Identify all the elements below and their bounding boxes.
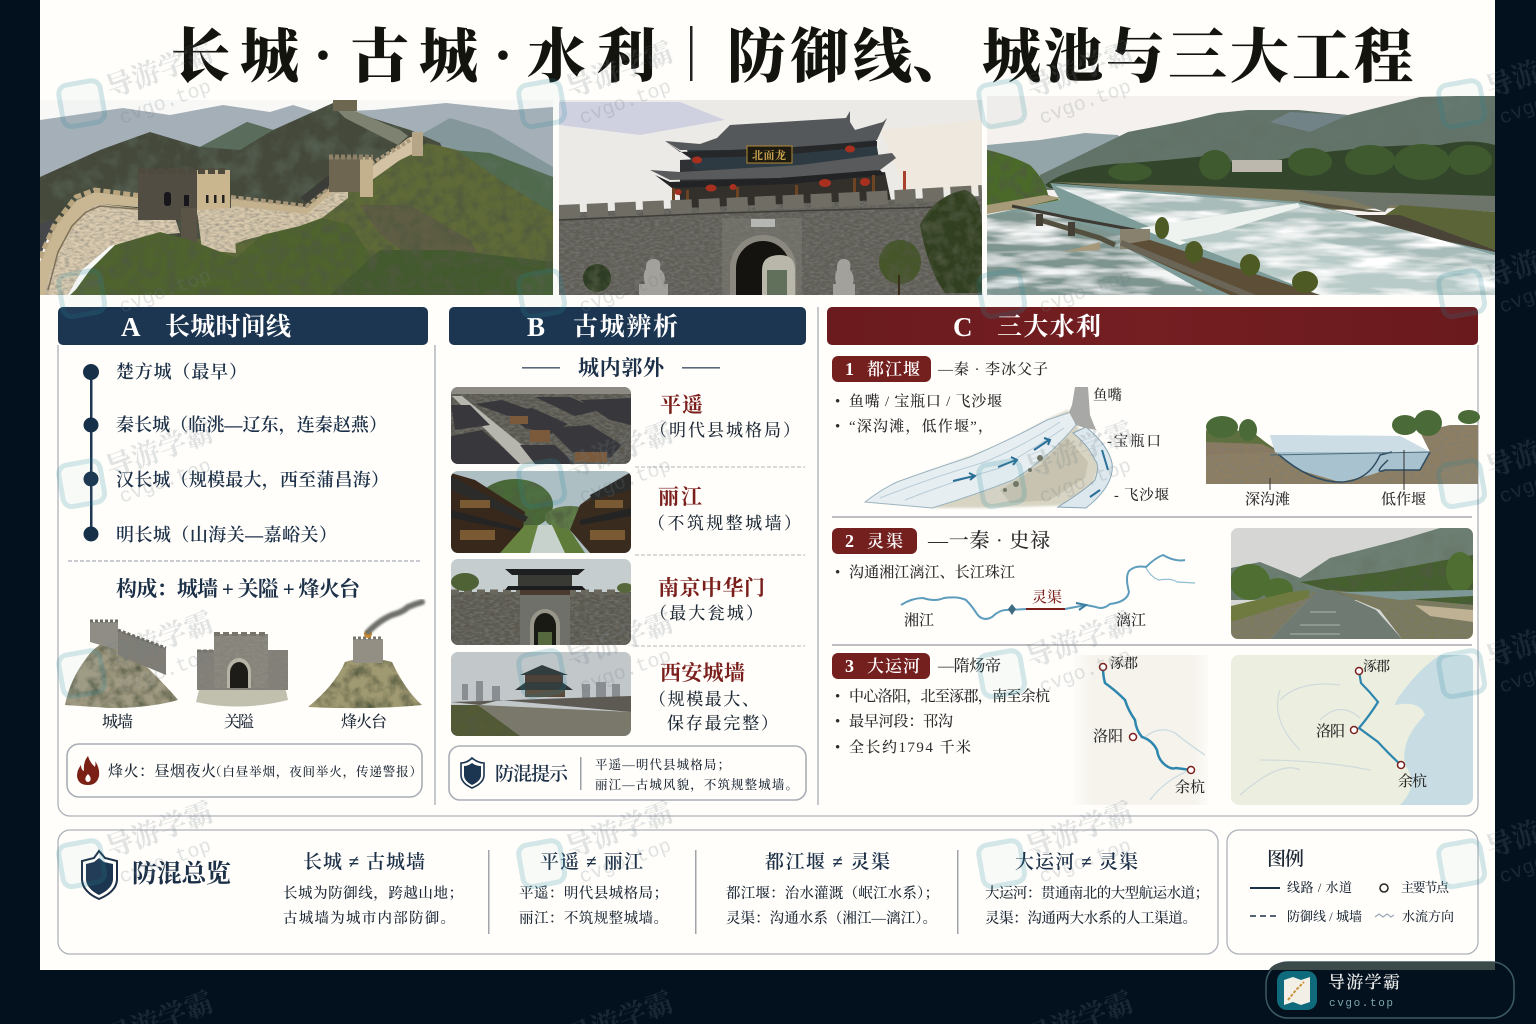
labels of cities: 保存最完整）	[667, 714, 778, 733]
left big wall	[40, 202, 180, 295]
labels of diagram: - 飞沙堰	[1114, 487, 1170, 504]
far treeline	[1045, 142, 1495, 196]
watermarks: cvgo.top	[117, 455, 215, 510]
watermarks: 导游学霸	[101, 796, 218, 865]
main panels frame	[58, 345, 1478, 816]
icon: fortified pass	[196, 634, 288, 707]
watermarks: 导游学霸	[101, 416, 218, 485]
water	[987, 183, 1495, 295]
watermarks: cvgo.top	[117, 645, 215, 700]
watermarks: 导游学霸	[561, 416, 678, 485]
labels of components: 城墙	[102, 712, 133, 731]
watermarks: cvgo.top	[117, 265, 215, 320]
labels of cities: （不筑规整城墙）	[648, 514, 801, 533]
far wall	[338, 111, 408, 145]
diagram: Dujiangyan river split	[865, 387, 1112, 508]
panel A: Great Wall timeline	[58, 307, 428, 797]
photo: Great Wall on mountain ridge	[40, 97, 553, 295]
title: 城池与三大工程	[982, 24, 1413, 90]
watermarks: 导游学霸	[1021, 416, 1138, 485]
labels of cities: 平遥	[660, 393, 703, 417]
photo: ancient city gate tower	[559, 100, 982, 295]
title: 防御线	[727, 24, 912, 90]
section 1: Dujiangyan: •	[835, 394, 840, 410]
wall section mid	[231, 192, 348, 244]
title: ·	[313, 22, 333, 88]
section 3: Grand Canal	[832, 653, 1473, 805]
section 1: Dujiangyan: 鱼嘴 / 宝瓶口 / 飞沙堰	[849, 392, 1002, 410]
tag 2: 灵渠	[867, 531, 903, 551]
section 3: Grand Canal: •	[835, 740, 840, 756]
diagram: Lingqu canal	[901, 555, 1195, 619]
watermarks: cvgo.top	[117, 76, 215, 131]
comparison 4	[985, 850, 1209, 927]
trees	[583, 264, 611, 292]
tag 2: 2	[845, 531, 854, 551]
watermarks: 导游学霸	[1021, 606, 1138, 675]
map: canal route sketch: 涿郡	[1110, 656, 1138, 672]
comparison 1: 长城 ≠ 古城墙	[303, 851, 425, 873]
watermarks: cvgo.top	[1037, 455, 1135, 510]
labels of cross-section: 低作堰	[1381, 491, 1426, 508]
timeline: 秦长城（临洮—辽东，连秦赵燕）	[116, 414, 387, 436]
photo: Dujiangyan river weir	[987, 95, 1495, 295]
map: China east canal: 涿郡	[1363, 659, 1390, 675]
gate	[722, 218, 802, 295]
tag 1: 1	[845, 359, 854, 379]
labels of cities: （最大瓮城）	[650, 604, 763, 623]
watermarks: 导游学霸	[1021, 796, 1138, 865]
callout: anti-confusion hint: 丽江—古城风貌，不筑规整城墙。	[595, 777, 798, 792]
panel: legend: 水流方向	[1402, 909, 1454, 924]
section 2: Lingqu	[832, 528, 1474, 639]
comparison 4: 大运河 ≠ 灵渠	[1015, 850, 1138, 873]
map: canal route sketch: 余杭	[1175, 778, 1205, 796]
labels of cross-section	[1245, 491, 1426, 508]
header C: C	[953, 312, 972, 342]
first tower	[138, 170, 200, 220]
panel: anti-confusion overview	[58, 830, 1218, 954]
labels of canal: 湘江	[904, 612, 934, 629]
watermarks: 导游学霸	[101, 606, 218, 675]
panel: legend: 主要节点	[1401, 880, 1450, 895]
watermarks: cvgo.top	[1037, 645, 1135, 700]
watermarks: cvgo.top	[1037, 265, 1135, 320]
watermarks: cvgo.top	[1037, 835, 1135, 890]
lanterns	[674, 146, 870, 195]
second tower	[329, 157, 360, 192]
tag 3	[832, 653, 930, 679]
map: China east canal	[1231, 655, 1473, 805]
icon: map logo	[1277, 971, 1317, 1010]
icon: wall on hill	[65, 621, 178, 708]
timeline: 明长城（山海关—嘉峪关）	[116, 525, 337, 545]
photo: Lijiang	[451, 471, 631, 553]
watermarks: 导游学霸	[101, 36, 218, 105]
section 1: Dujiangyan: •	[835, 419, 840, 435]
title: 水利	[527, 24, 656, 90]
watermarks: 导游学霸	[561, 606, 678, 675]
comparison 1: 古城墙为城市内部防御。	[283, 909, 455, 927]
comparison 4: 灵渠：沟通两大水系的人工渠道。	[985, 909, 1197, 927]
section 2: Lingqu: 沟通湘江漓江、长江珠江	[849, 564, 1015, 581]
tag 3: 3	[845, 656, 854, 676]
title	[171, 22, 1413, 90]
labels of canal: 灵渠	[1032, 588, 1062, 606]
shrubs	[72, 218, 371, 295]
photo: Lingqu canal	[1230, 528, 1474, 639]
section 3: Grand Canal: •	[835, 689, 840, 705]
comparison 3: 灵渠：沟通水系（湘江—漓江）。	[726, 909, 937, 927]
right wall to second tower	[373, 136, 412, 180]
watermarks: cvgo.top	[577, 835, 675, 890]
labels of cities: 南京中华门	[658, 576, 765, 600]
panel C: three water projects	[827, 307, 1480, 805]
overview heading: 防混总览	[132, 860, 231, 888]
watermarks: 导游学霸	[561, 36, 678, 105]
photo: ancient city gate tower: 北面龙	[752, 148, 786, 162]
map: canal route sketch: 洛阳	[1093, 728, 1123, 745]
tag 3: 大运河	[867, 657, 920, 676]
icon: large shield	[82, 851, 117, 899]
section 3: Grand Canal: 最早河段：邗沟	[849, 713, 953, 730]
callout: beacon note	[67, 744, 422, 797]
labels of diagram: -宝瓶口	[1107, 433, 1161, 450]
comparison 3	[726, 850, 939, 927]
section 1: Dujiangyan: —秦 · 李冰父子	[937, 360, 1048, 378]
header C: 三大水利	[997, 313, 1101, 341]
icon: flame	[77, 756, 99, 785]
title: ·	[493, 22, 513, 88]
labels of cities: 西安城墙	[660, 661, 745, 685]
panel B: ancient cities	[449, 307, 806, 800]
labels of cities: （明代县城格局）	[650, 421, 800, 440]
timeline: 汉长城（规模最大，西至蒲昌海）	[116, 469, 389, 491]
banks	[1051, 182, 1400, 210]
panel: legend: 图例	[1267, 848, 1304, 870]
section 1: Dujiangyan	[832, 356, 1480, 508]
labels of components: 烽火台	[341, 713, 387, 731]
comparison 4: 大运河：贯通南北的大型航运水道；	[985, 884, 1209, 902]
watermarks: cvgo.top	[577, 76, 675, 131]
labels of canal: 漓江	[1116, 612, 1146, 629]
labels of cities: （规模最大、	[649, 690, 759, 709]
labels of components: 关隘	[224, 713, 254, 731]
comparison 2: 平遥：明代县城格局；	[519, 884, 668, 902]
timeline: 楚方城（最早）	[116, 362, 247, 382]
city wall	[559, 196, 982, 295]
section 1: Dujiangyan: “深沟滩，低作堰”，	[849, 418, 993, 435]
labels of diagram	[1093, 386, 1170, 504]
section 2: Lingqu: —一秦 · 史禄	[927, 529, 1050, 552]
subheading: 城内郭外	[578, 356, 666, 380]
header A	[58, 307, 428, 345]
comparison 2: 丽江：不筑规整城墙。	[519, 909, 668, 927]
panel: legend	[1227, 830, 1478, 954]
map: China east canal: 洛阳	[1316, 723, 1345, 740]
diagram: river cross-section	[1206, 410, 1480, 490]
composition heading: 构成：城墙 + 关隘 + 烽火台	[116, 577, 361, 601]
photo: Nanjing Zhonghua Gate	[451, 559, 633, 645]
comparison 2: 平遥 ≠ 丽江	[540, 851, 643, 873]
labels of cross-section: 深沟滩	[1245, 491, 1290, 508]
badge: brand logo: 导游学霸	[1328, 973, 1400, 992]
panel: legend: 防御线 / 城墙	[1287, 909, 1362, 924]
labels of components	[102, 712, 387, 731]
comparison 1	[283, 851, 463, 927]
callout: anti-confusion hint	[449, 746, 806, 800]
title: 、	[912, 24, 971, 90]
title: 古城	[350, 24, 478, 90]
header C	[827, 307, 1478, 345]
comparison 2	[519, 851, 668, 927]
tag 2	[832, 528, 917, 554]
timeline	[83, 362, 389, 545]
labels of cities: 丽江	[658, 485, 702, 509]
section 3: Grand Canal: •	[835, 714, 840, 730]
title: 长城	[171, 24, 299, 90]
header A: 长城时间线	[165, 313, 291, 341]
watermarks: cvgo.top	[1037, 76, 1135, 131]
watermarks: cvgo.top	[577, 455, 675, 510]
tag 1	[832, 356, 931, 382]
callout: beacon note: （白昼举烟，夜间举火，传递警报）	[209, 764, 422, 779]
watermarks: 导游学霸	[1021, 36, 1138, 105]
comparison 3: 都江堰 ≠ 灵渠	[765, 850, 890, 873]
badge: brand logo: cvgo.top	[1329, 998, 1393, 1010]
lions	[639, 259, 855, 295]
labels of canal	[904, 588, 1146, 629]
watermarks: cvgo.top	[577, 265, 675, 320]
section 2: Lingqu: •	[835, 565, 840, 581]
map: canal route sketch	[1073, 655, 1208, 805]
watermarks: cvgo.top	[577, 645, 675, 700]
labels of diagram: 鱼嘴	[1093, 386, 1122, 404]
tag 1: 都江堰	[867, 360, 920, 379]
comparison 1: 长城为防御线，跨越山地；	[283, 884, 463, 902]
map: China east canal: 余杭	[1398, 772, 1427, 790]
panel: legend: 线路 / 水道	[1287, 880, 1352, 895]
header B: 古城辨析	[573, 313, 678, 341]
watermarks: 导游学霸	[561, 796, 678, 865]
comparison 3: 都江堰：治水灌溉（岷江水系）；	[726, 884, 939, 902]
section 3: Grand Canal: 全长约1794 千米	[849, 738, 971, 756]
bridge and pier	[1012, 206, 1135, 230]
header A: A	[121, 312, 141, 342]
roofs and floors	[680, 159, 877, 208]
icon: shield	[461, 758, 484, 788]
callout: anti-confusion hint: 防混提示	[495, 762, 569, 785]
callout: beacon note: 烽火：昼烟夜火	[108, 762, 216, 780]
section 3: Grand Canal: —隋炀帝	[937, 657, 1001, 675]
photo: Pingyao	[451, 387, 631, 464]
header B	[449, 307, 806, 345]
icon: beacon tower with smoke	[308, 602, 422, 708]
header B: B	[527, 312, 545, 342]
section 3: Grand Canal: 中心洛阳，北至涿郡，南至余杭	[849, 687, 1050, 705]
watermarks: cvgo.top	[117, 835, 215, 890]
callout: anti-confusion hint: 平遥—明代县城格局；	[595, 757, 730, 772]
badge: brand logo	[1266, 962, 1514, 1018]
photo: Xi'an city wall	[451, 652, 631, 736]
labels of cities	[635, 393, 805, 733]
